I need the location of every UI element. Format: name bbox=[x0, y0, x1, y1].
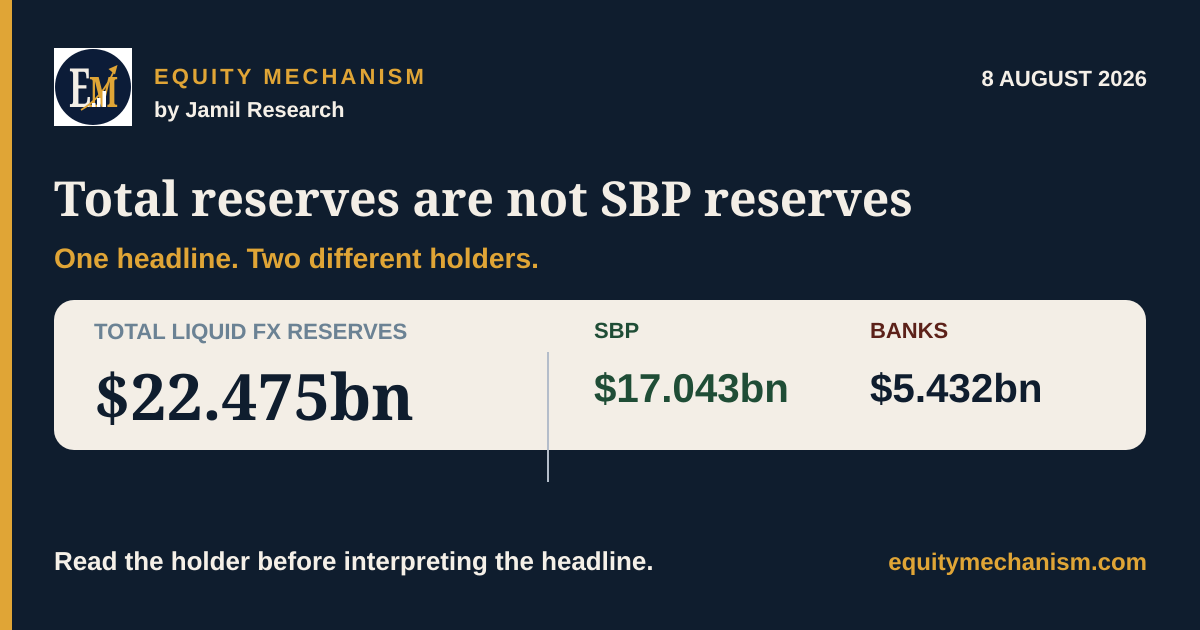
icon: logo: E bbox=[69, 49, 91, 123]
panel: reserves bbox=[54, 300, 1146, 450]
total label: TOTAL LIQUID FX RESERVES bbox=[94, 319, 407, 344]
title: Total reserves are not SBP reserves bbox=[54, 165, 912, 231]
banks label: BANKS bbox=[870, 318, 948, 343]
icon: logo bbox=[54, 48, 132, 126]
accent bar bbox=[0, 0, 12, 630]
subtitle: One headline. Two different holders. bbox=[54, 242, 539, 274]
brand name: EQUITY MECHANISM bbox=[154, 64, 427, 89]
total value: $22.475bn bbox=[94, 352, 414, 439]
SBP label: SBP bbox=[594, 318, 639, 343]
takeaway: Read the holder before interpreting the headline. bbox=[54, 548, 654, 576]
icon: logo: M bbox=[89, 63, 118, 120]
divider bbox=[547, 352, 549, 482]
date: 8 AUGUST 2026 bbox=[982, 66, 1147, 91]
byline: by Jamil Research bbox=[154, 97, 344, 122]
banks value: $5.432bn bbox=[870, 366, 1042, 411]
SBP value: $17.043bn bbox=[594, 366, 789, 411]
website: equitymechanism.com bbox=[888, 549, 1147, 576]
